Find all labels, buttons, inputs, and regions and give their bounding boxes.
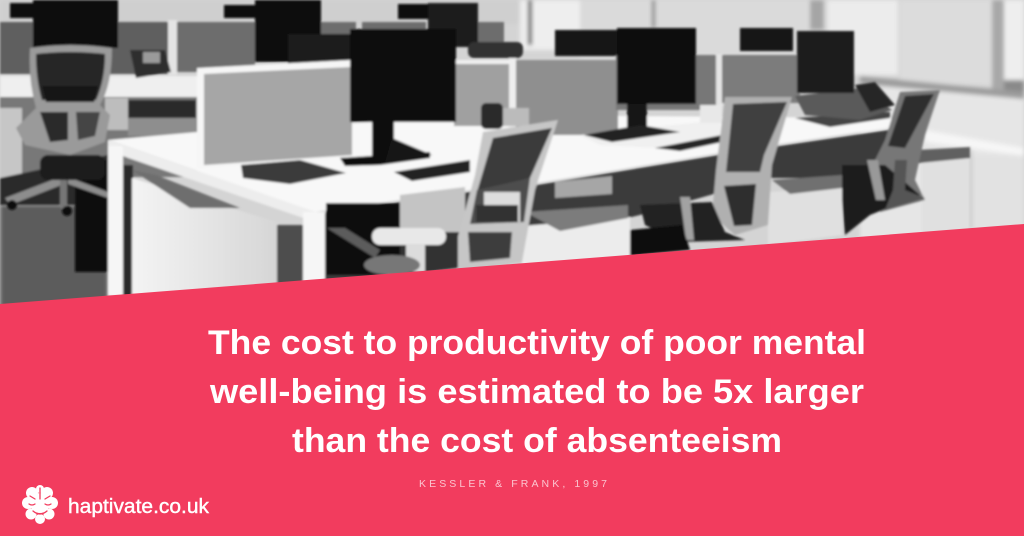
- pedestals: [522, 217, 630, 268]
- back left desk: [0, 76, 197, 97]
- shade under right desk: [325, 129, 900, 290]
- far wall and windows: [0, 0, 520, 24]
- headline: than the cost of absenteeism: [292, 422, 782, 460]
- chair 3: [630, 97, 792, 256]
- back row monitors: [33, 0, 118, 48]
- dark area below back desk: [0, 155, 108, 270]
- headline: The cost to productivity of poor mental: [208, 324, 866, 362]
- left chair: [16, 45, 112, 155]
- white pedestal: [132, 178, 277, 300]
- chair 2 front: [327, 120, 558, 276]
- photo: black and white office desks: [0, 0, 1024, 310]
- red diagonal panel: [0, 224, 1024, 536]
- left chair base: [5, 177, 64, 205]
- partition 2: [352, 60, 520, 65]
- main partition 1: [197, 60, 350, 168]
- headline: [208, 324, 866, 460]
- website url: haptivate.co.uk: [68, 496, 210, 518]
- phone: [130, 50, 171, 78]
- citation: KESSLER & FRANK, 1997: [419, 478, 607, 490]
- floor: [0, 205, 108, 310]
- headline: well-being is estimated to be 5x larger: [209, 373, 864, 411]
- back row partitions: [0, 22, 168, 74]
- icon: brain logo: [22, 485, 58, 524]
- phone on main desk: [481, 103, 503, 129]
- right side wall and cabinets: [860, 78, 1024, 300]
- left desk legs: [108, 146, 123, 296]
- main desk surface: [108, 115, 900, 212]
- main monitors: [350, 29, 456, 122]
- chair 4: [842, 90, 940, 235]
- desk items: [241, 160, 346, 184]
